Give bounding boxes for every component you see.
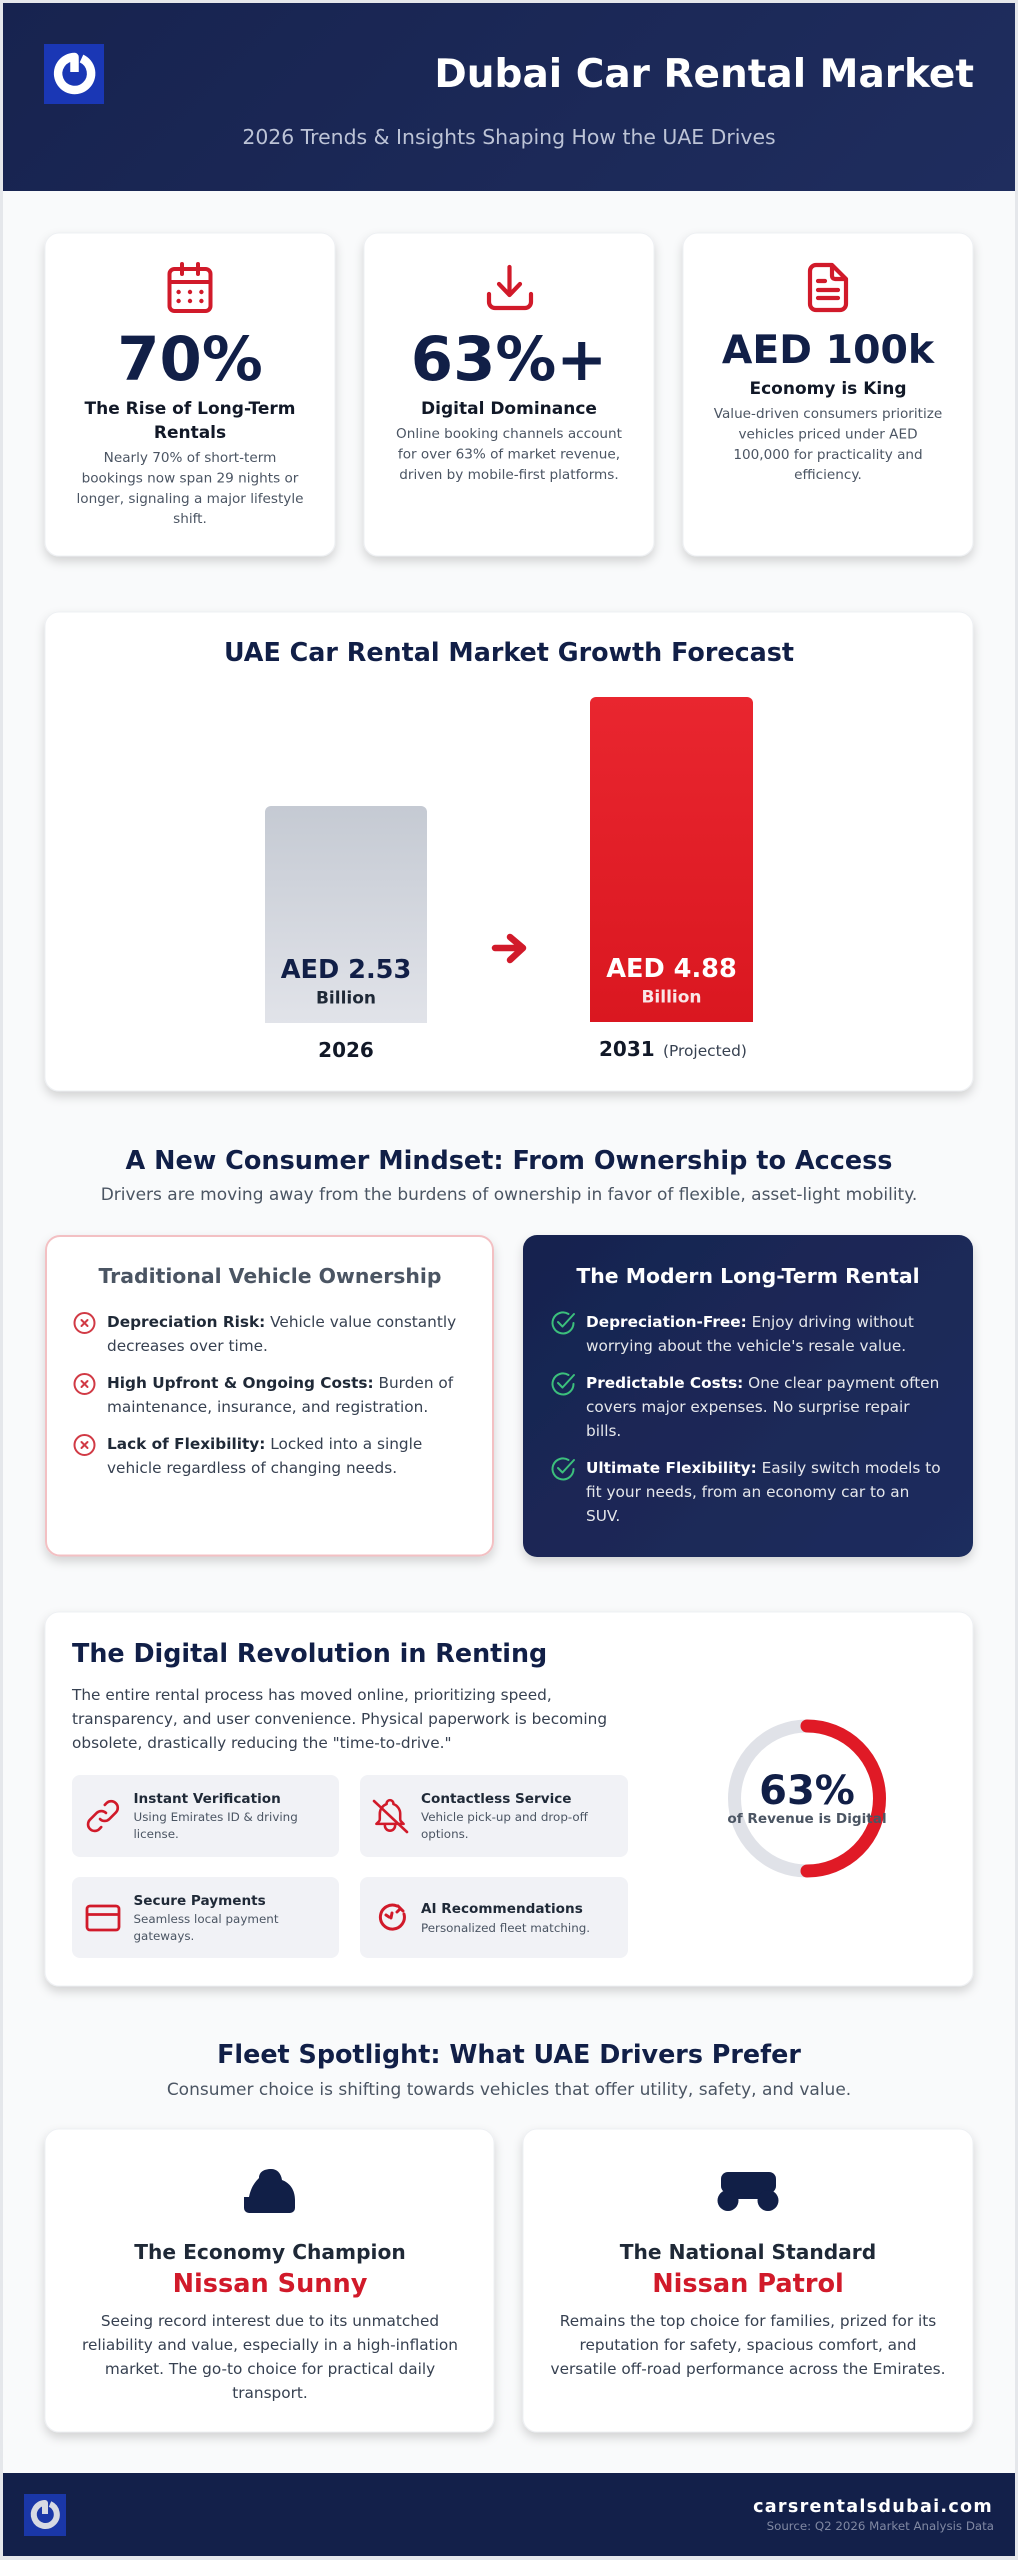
panel heading: Traditional Vehicle Ownership bbox=[98, 1264, 442, 1288]
header banner bbox=[3, 3, 1015, 191]
feature: instant verification bbox=[72, 1775, 339, 1857]
stat description bbox=[396, 426, 622, 483]
car description bbox=[82, 2312, 458, 2402]
car name: Nissan Sunny bbox=[173, 2269, 368, 2299]
item: predictable costs: bills. bbox=[586, 1422, 621, 1440]
stat card: digital dominance bbox=[364, 233, 654, 556]
car description: Seeing record interest due to its unmatched bbox=[101, 2312, 439, 2330]
item: upfront costs bbox=[74, 1374, 454, 1416]
feature: secure payments: gateways. bbox=[134, 1929, 194, 1943]
donut chart: 63% bbox=[759, 1768, 855, 1814]
stat description: longer, signaling a major lifestyle bbox=[76, 491, 304, 507]
item: depreciation risk: Depreciation Risk: Vehicle value constantly bbox=[107, 1313, 456, 1331]
feature: secure payments: Seamless local payment bbox=[134, 1912, 279, 1926]
bar: 2026: 2026 bbox=[318, 1038, 374, 1062]
icon: economy car bbox=[244, 2169, 295, 2213]
car category: The Economy Champion bbox=[134, 2240, 406, 2264]
panel: digital revolution bbox=[45, 1612, 973, 1986]
donut chart bbox=[727, 1726, 887, 1871]
stat value: 70% bbox=[117, 325, 263, 395]
bar: 2031: 2031 bbox=[599, 1037, 655, 1061]
intro paragraph: transparency, and user convenience. Physical paperwork is becoming bbox=[72, 1710, 607, 1728]
item: depreciation risk: decreases over time. bbox=[107, 1337, 268, 1355]
item: ultimate flexibility: Ultimate Flexibility: Easily switch models to bbox=[586, 1459, 941, 1477]
icon: download bbox=[489, 267, 531, 308]
section heading: consumer mindset: A New Consumer Mindset: From Ownership to Access bbox=[126, 1146, 892, 1176]
car description: versatile off-road performance across the Emirates. bbox=[551, 2360, 945, 2378]
stat description bbox=[714, 406, 942, 483]
feature: instant verification: Using Emirates ID & driving bbox=[134, 1810, 298, 1824]
panel: market growth forecast bbox=[45, 612, 973, 1091]
item: upfront costs: High Upfront & Ongoing Costs: Burden of bbox=[107, 1374, 454, 1392]
intro paragraph bbox=[71, 1686, 607, 1752]
panel: nissan patrol bbox=[523, 2129, 973, 2432]
stat description: 100,000 for practicality and bbox=[733, 447, 923, 463]
car description: reputation for safety, spacious comfort, and bbox=[580, 2336, 916, 2354]
item: depreciation-free bbox=[553, 1312, 914, 1355]
stat description: bookings now span 29 nights or bbox=[82, 470, 299, 486]
panel: nissan sunny bbox=[45, 2129, 494, 2432]
feature: contactless service: options. bbox=[421, 1827, 469, 1841]
panel: traditional vehicle ownership bbox=[46, 1236, 493, 1556]
panel heading: The Modern Long-Term Rental bbox=[576, 1264, 920, 1288]
feature: ai recommendations: AI Recommendations bbox=[421, 1901, 583, 1917]
feature: contactless service bbox=[360, 1775, 628, 1857]
stat description: driven by mobile-first platforms. bbox=[399, 467, 619, 483]
feature: instant verification: Instant Verification bbox=[134, 1791, 281, 1807]
intro paragraph: The entire rental process has moved online, prioritizing speed, bbox=[71, 1686, 552, 1704]
car category: The National Standard bbox=[620, 2240, 876, 2264]
intro paragraph: obsolete, drastically reducing the "time-to-drive." bbox=[72, 1734, 452, 1752]
section heading: fleet spotlight: Consumer choice is shifting towards vehicles that offer utility, safety, and value. bbox=[167, 2080, 851, 2100]
section heading: fleet spotlight: Fleet Spotlight: What UAE Drivers Prefer bbox=[217, 2039, 801, 2069]
feature: ai recommendations: Personalized fleet matching. bbox=[421, 1921, 590, 1935]
stat description bbox=[76, 450, 304, 527]
bar: 2031 bbox=[590, 697, 753, 1061]
stat heading: Economy is King bbox=[749, 379, 907, 399]
arrow bbox=[495, 937, 523, 960]
item: ultimate flexibility: fit your needs, from an economy car to an bbox=[586, 1483, 909, 1501]
car description bbox=[551, 2312, 945, 2378]
stat description: efficiency. bbox=[794, 467, 862, 483]
donut chart: of Revenue is Digital bbox=[727, 1811, 887, 1827]
stat card: economy is king bbox=[683, 233, 973, 556]
panel heading: The Digital Revolution in Renting bbox=[72, 1638, 547, 1668]
icon: document bbox=[810, 265, 846, 310]
stat heading: The Rise of Long-Term bbox=[85, 399, 295, 419]
item: lack of flexibility bbox=[74, 1435, 422, 1477]
feature: contactless service: Vehicle pick-up and drop-off bbox=[421, 1810, 589, 1824]
item: depreciation-free: worrying about the vehicle's resale value. bbox=[586, 1337, 906, 1355]
logo bbox=[44, 44, 104, 104]
car description: Remains the top choice for families, prized for its bbox=[560, 2312, 936, 2330]
icon: calendar bbox=[170, 264, 210, 311]
stat card: long-term rentals bbox=[45, 233, 335, 556]
feature: ai recommendations bbox=[360, 1877, 628, 1958]
bar: 2026 bbox=[265, 806, 427, 1062]
chart heading: UAE Car Rental Market Growth Forecast bbox=[224, 637, 794, 667]
stat description: for over 63% of market revenue, bbox=[398, 446, 620, 462]
subtitle: 2026 Trends & Insights Shaping How the UAE Drives bbox=[242, 125, 776, 149]
item: lack of flexibility: vehicle regardless of changing needs. bbox=[107, 1459, 397, 1477]
item: predictable costs bbox=[553, 1373, 939, 1440]
stat description: Value-driven consumers prioritize bbox=[714, 406, 942, 422]
feature: instant verification: license. bbox=[134, 1827, 179, 1841]
stat value: 63%+ bbox=[411, 325, 607, 395]
item: ultimate flexibility: SUV. bbox=[586, 1507, 620, 1525]
car description: market. The go-to choice for practical daily bbox=[105, 2360, 435, 2378]
stat description: Nearly 70% of short-term bbox=[104, 450, 276, 466]
feature: secure payments bbox=[72, 1877, 339, 1958]
car description: transport. bbox=[232, 2384, 308, 2402]
item: depreciation-free: Depreciation-Free: Enjoy driving without bbox=[586, 1313, 914, 1331]
source note: Source: Q2 2026 Market Analysis Data bbox=[767, 2519, 994, 2533]
website: carsrentalsdubai.com bbox=[753, 2497, 993, 2517]
item: ultimate flexibility bbox=[553, 1458, 941, 1525]
panel: modern long-term rental bbox=[523, 1235, 973, 1557]
item: upfront costs: maintenance, insurance, and registration. bbox=[107, 1398, 428, 1416]
stat description: shift. bbox=[173, 511, 207, 527]
footer logo bbox=[24, 2494, 66, 2536]
stat heading: Rentals bbox=[154, 423, 226, 443]
item: predictable costs: covers major expenses. No surprise repair bbox=[586, 1398, 910, 1416]
stat heading: Digital Dominance bbox=[421, 399, 597, 419]
footer bbox=[3, 2473, 1015, 2556]
section heading: fleet spotlight bbox=[167, 2039, 851, 2100]
item: lack of flexibility: Lack of Flexibility: Locked into a single bbox=[107, 1435, 422, 1453]
feature: contactless service: Contactless Service bbox=[421, 1791, 572, 1807]
bar: 2031: (Projected) bbox=[663, 1042, 747, 1060]
stat description: Online booking channels account bbox=[396, 426, 622, 442]
car description: reliability and value, especially in a high-inflation bbox=[82, 2336, 458, 2354]
stat value: AED 100k bbox=[722, 327, 935, 373]
icon: suv bbox=[718, 2172, 778, 2211]
section heading: consumer mindset bbox=[101, 1146, 917, 1205]
car name: Nissan Patrol bbox=[652, 2269, 844, 2299]
bar: 2026: AED 2.53 bbox=[281, 955, 411, 985]
item: predictable costs: Predictable Costs: One clear payment often bbox=[586, 1374, 939, 1392]
section heading: consumer mindset: Drivers are moving away from the burdens of ownership in favor of flexible, asset-light mobility. bbox=[101, 1185, 917, 1205]
stat description: vehicles priced under AED bbox=[738, 426, 918, 442]
bar: 2026: Billion bbox=[316, 988, 376, 1008]
feature: secure payments: Secure Payments bbox=[134, 1893, 266, 1909]
stat heading bbox=[85, 399, 295, 443]
bar: 2031: Billion bbox=[641, 988, 702, 1008]
item: depreciation risk bbox=[74, 1313, 456, 1355]
title: Dubai Car Rental Market bbox=[434, 52, 974, 97]
bar: 2031: AED 4.88 bbox=[606, 954, 737, 984]
